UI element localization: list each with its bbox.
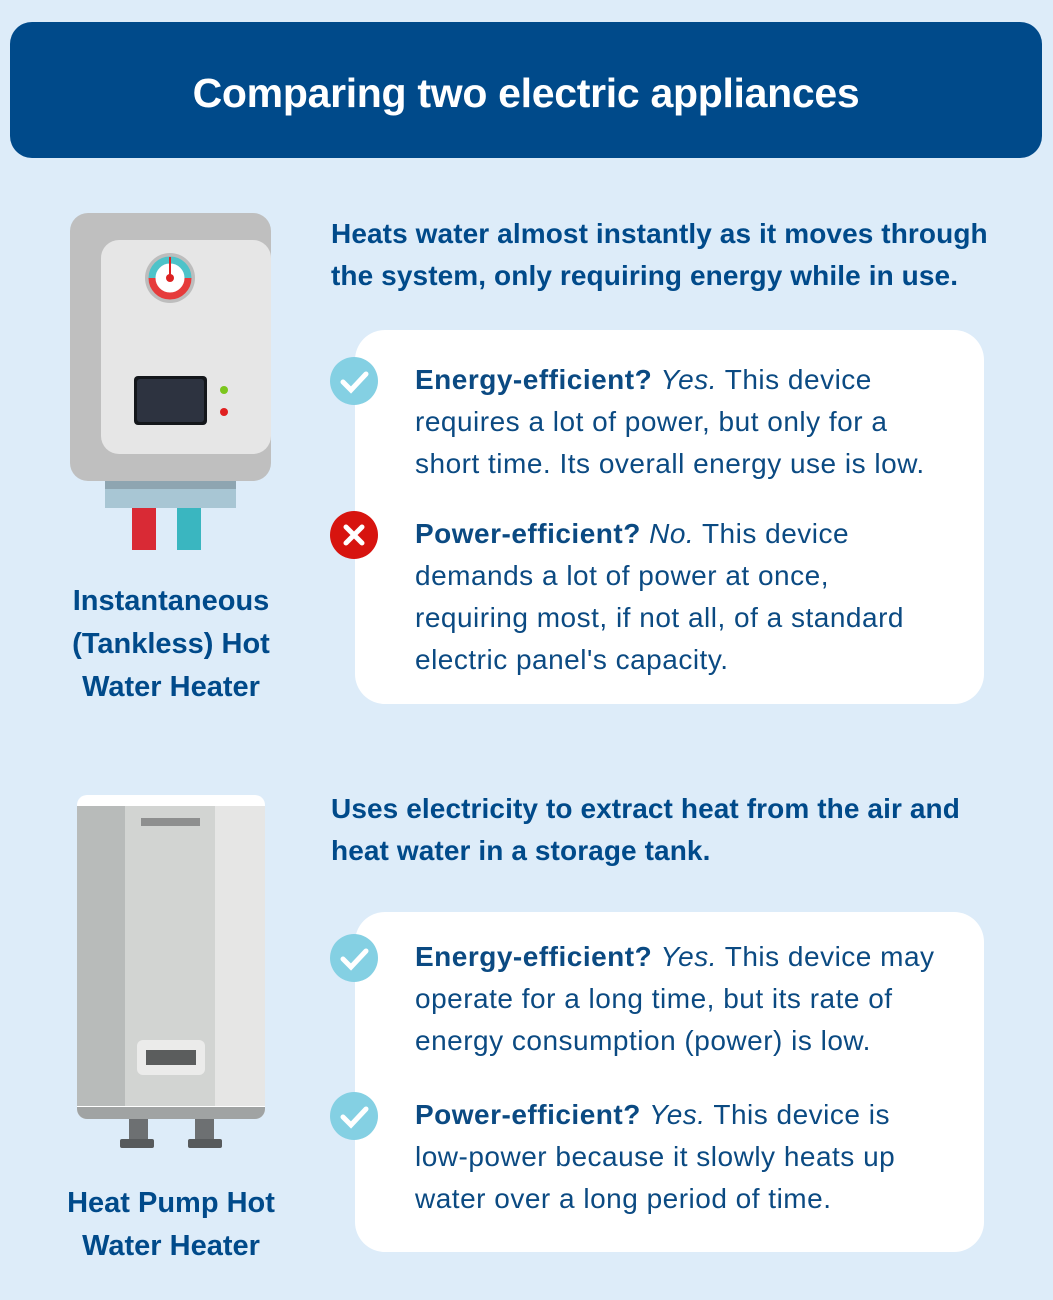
icon: tankless heater — [70, 213, 271, 550]
text: power-efficient 1 — [415, 518, 904, 675]
text: power-efficient 2: water over a long period of time. — [415, 1183, 831, 1214]
text: power-efficient 1: electric panel's capacity. — [415, 644, 729, 675]
heading: tankless description — [331, 218, 988, 291]
text: power-efficient 1: Power-efficient? No. This device — [415, 518, 849, 549]
icon: check 1 — [330, 357, 378, 405]
text: power-efficient 1: requiring most, if not all, of a standard — [415, 602, 904, 633]
label: tankless: Instantaneous (Tankless) Hot Water Heater — [72, 585, 270, 703]
text: power-efficient 2 — [415, 1099, 895, 1214]
panel: heat pump — [355, 912, 984, 1252]
icon: cross — [330, 511, 378, 559]
heading: tankless description: Heats water almost instantly as it moves through — [331, 218, 988, 249]
heading: tankless description: the system, only requiring energy while in use. — [331, 260, 958, 291]
icon: check 3 — [330, 1092, 378, 1140]
text: energy-efficient 2: operate for a long time, but its rate of — [415, 983, 893, 1014]
text: energy-efficient 1 — [415, 364, 925, 479]
heading: heat pump description: Uses electricity to extract heat from the air and — [331, 793, 960, 824]
text: energy-efficient 2 — [415, 941, 935, 1056]
text: power-efficient 1: demands a lot of power at once, — [415, 560, 829, 591]
panel: tankless — [355, 330, 984, 704]
text: energy-efficient 1: short time. Its overall energy use is low. — [415, 448, 925, 479]
text: energy-efficient 2: Energy-efficient? Yes. This device may — [415, 941, 935, 972]
title: Comparing two electric appliances — [193, 70, 859, 116]
text: power-efficient 2: low-power because it slowly heats up — [415, 1141, 895, 1172]
title — [10, 22, 1042, 158]
text: power-efficient 2: Power-efficient? Yes. This device is — [415, 1099, 890, 1130]
text: energy-efficient 1: Energy-efficient? Yes. This device — [415, 364, 872, 395]
text: energy-efficient 2: energy consumption (power) is low. — [415, 1025, 871, 1056]
icon: heat pump heater — [77, 795, 265, 1148]
text: energy-efficient 1: requires a lot of power, but only for a — [415, 406, 887, 437]
heading: heat pump description — [331, 793, 960, 866]
label: heat pump: Heat Pump Hot Water Heater — [67, 1187, 275, 1262]
icon: check 2 — [330, 934, 378, 982]
heading: heat pump description: heat water in a storage tank. — [331, 835, 710, 866]
